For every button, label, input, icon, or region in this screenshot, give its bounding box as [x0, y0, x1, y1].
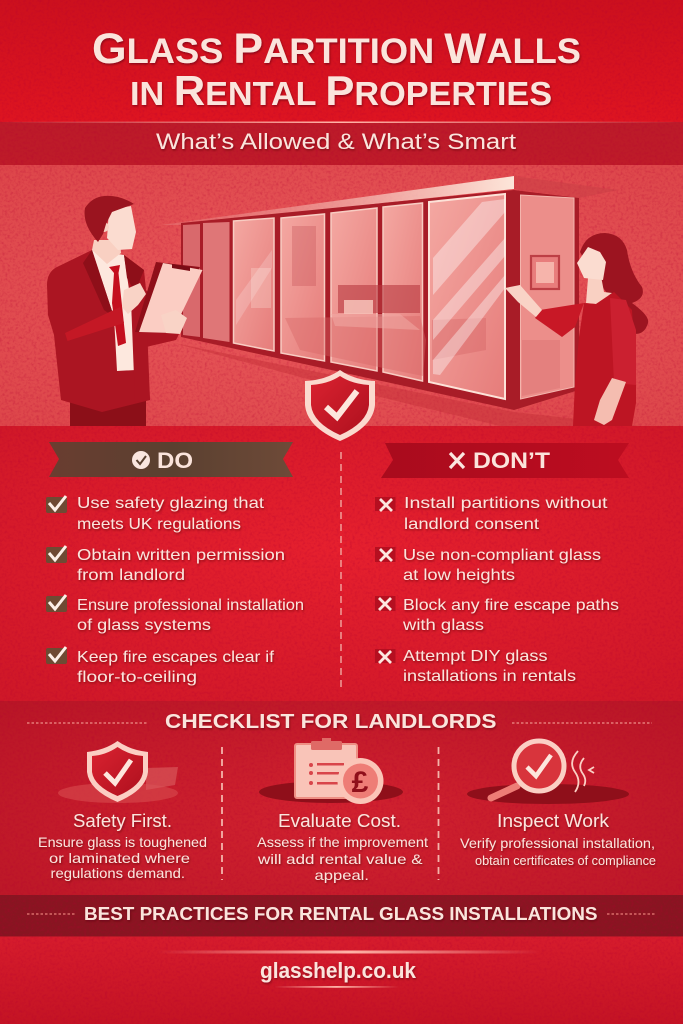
DON'T list text: [402, 495, 619, 685]
roof: [514, 176, 618, 198]
DO list text: Ensure professional installation: [77, 597, 304, 614]
dress: [573, 292, 636, 426]
column divider: [340, 452, 342, 687]
sleeve: [610, 298, 636, 385]
frame: [181, 190, 579, 410]
DO list text: Obtain written permission: [77, 547, 285, 564]
card: evaluate cost: Assess if the improvement: [257, 834, 428, 850]
icon: magnifying glass: [467, 741, 629, 804]
clipboard: [135, 262, 200, 333]
DON'T banner: [381, 443, 629, 478]
neck: [586, 276, 612, 304]
icon: clipboard and pound coin: [259, 738, 403, 804]
DON'T list text: landlord consent: [404, 516, 540, 533]
panel: DO: [46, 442, 304, 686]
DO list text: [77, 495, 304, 686]
shirt: [92, 250, 136, 371]
card: safety first: Safety First.: [73, 811, 172, 831]
floor shadow: [174, 343, 640, 426]
card: safety first: regulations demand.: [50, 865, 185, 881]
head: [107, 206, 136, 250]
footer website: glasshelp.co.uk: [260, 958, 417, 983]
illustration: woman gesturing: [505, 233, 648, 426]
room interior: bed and furniture: [251, 226, 560, 396]
DO list text: of glass systems: [77, 617, 211, 634]
card: safety first: [38, 811, 207, 881]
illustration: man with clipboard: [47, 196, 202, 426]
DO list text: floor-to-ceiling: [77, 669, 197, 686]
wall picture: [531, 256, 559, 289]
jacket: [47, 250, 180, 412]
illustration: glass partition wall: [161, 176, 640, 426]
DO list text: Keep fire escapes clear if: [77, 649, 275, 666]
checklist heading: CHECKLIST FOR LANDLORDS: [165, 711, 496, 733]
hand raised: [505, 285, 542, 317]
hands: [122, 283, 146, 314]
heading band background: [0, 122, 683, 165]
arm: [65, 307, 124, 341]
DON'T list text: installations in rentals: [403, 668, 576, 685]
DO list text: from landlord: [77, 567, 185, 584]
check: [326, 391, 357, 417]
DON'T list text: Use non-compliant glass: [403, 547, 601, 564]
card: inspect work: Verify professional installation,: [460, 835, 655, 851]
trousers: [70, 370, 146, 426]
neck: [92, 240, 121, 264]
subtitle: What’s Allowed & What’s Smart: [156, 129, 516, 154]
icon: clipboard and pound coin: £: [352, 766, 369, 799]
footer website: [157, 950, 540, 988]
DON'T list text: with glass: [402, 617, 484, 634]
title: IN RENTAL PROPERTIES: [130, 67, 552, 114]
title: GLASS PARTITION WALLS: [92, 25, 581, 73]
panel: checklist for landlords: [27, 711, 656, 883]
DO list text: Use safety glazing that: [77, 495, 265, 512]
panel: DON'T: [375, 443, 629, 685]
DON'T list text: Install partitions without: [404, 495, 608, 512]
face: [577, 247, 606, 280]
DON'T list text: Block any fire escape paths: [403, 597, 619, 614]
DON'T list text: at low heights: [403, 567, 515, 584]
tie: [109, 265, 126, 346]
card: evaluate cost: will add rental value &: [257, 851, 423, 867]
jacket right panel: [131, 300, 150, 402]
card: safety first: Ensure glass is toughened: [38, 834, 207, 850]
DO banner: [49, 442, 293, 477]
best practices band background: [0, 895, 683, 936]
shield badge: [305, 370, 375, 441]
DON'T list text: Attempt DIY glass: [403, 648, 548, 665]
arm: [535, 303, 584, 337]
DON'T crosses: [375, 497, 396, 663]
DO banner: DO: [157, 448, 193, 473]
card: inspect work: Inspect Work: [497, 811, 610, 831]
card: inspect work: [460, 811, 656, 868]
icon: safety shield: [58, 741, 178, 803]
card: inspect work: obtain certificates of compliance: [475, 853, 656, 868]
DO list text: meets UK regulations: [77, 516, 241, 533]
card: evaluate cost: [257, 811, 428, 883]
DON'T banner: DON’T: [473, 448, 551, 473]
glass highlights: [236, 199, 505, 375]
panes: [183, 194, 574, 399]
card: evaluate cost: appeal.: [314, 867, 369, 883]
hair: [580, 233, 648, 334]
lapels: [83, 250, 114, 317]
best practices heading: BEST PRACTICES FOR RENTAL GLASS INSTALLATIONS: [84, 904, 598, 924]
DO checkmarks: [46, 496, 67, 664]
forearm and hand: [594, 378, 626, 425]
title: [92, 25, 581, 114]
card: evaluate cost: Evaluate Cost.: [278, 811, 401, 831]
card: safety first: or laminated where: [49, 850, 190, 866]
